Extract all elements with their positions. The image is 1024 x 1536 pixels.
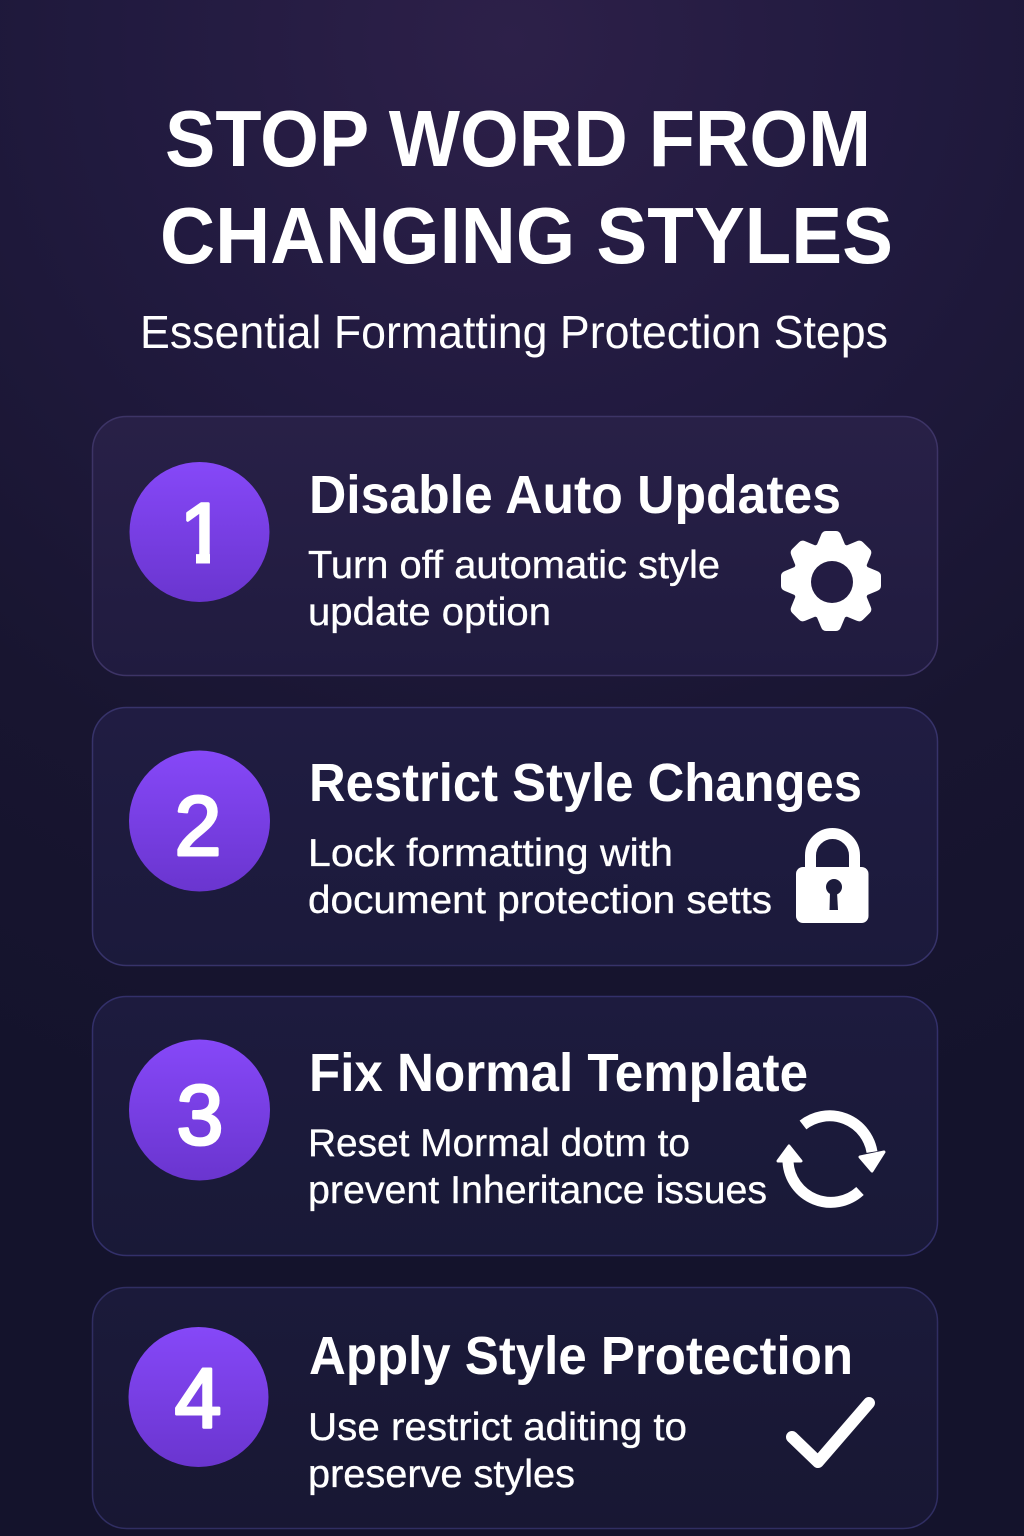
step 4 heading: Apply Style Protection <box>309 1326 853 1386</box>
card background <box>92 708 938 966</box>
number badge 3: 3 <box>177 1068 223 1162</box>
panel: step 3 <box>92 996 938 1256</box>
step 3 description <box>308 1122 767 1212</box>
step 4 description <box>308 1406 687 1496</box>
step 3 heading: Fix Normal Template <box>309 1043 808 1103</box>
title: STOP WORD FROM <box>165 94 871 183</box>
step 1 heading: Disable Auto Updates <box>309 465 841 525</box>
step 1 description: update option <box>308 591 551 634</box>
panel: step 2 <box>92 708 938 966</box>
step 4 description: Use restrict aditing to <box>308 1406 687 1449</box>
card background <box>92 416 938 676</box>
number badge 3 <box>129 1040 270 1180</box>
number badge 2: 2 <box>175 779 221 873</box>
step 2 heading: Restrict Style Changes <box>309 753 862 813</box>
panel: step 4 <box>92 1288 938 1528</box>
icon: padlock <box>796 834 868 923</box>
step 2 description: Lock formatting with <box>308 832 673 875</box>
panel: step 1 <box>92 416 938 676</box>
number badge 1 <box>130 462 270 602</box>
step 4 description: preserve styles <box>308 1453 575 1496</box>
icon: refresh arrows <box>778 1116 884 1202</box>
step 2 description <box>308 832 772 922</box>
step 1 description: Turn off automatic style <box>308 544 720 587</box>
subtitle: Essential Formatting Protection Steps <box>140 306 888 358</box>
icon: gear <box>781 531 881 631</box>
card background <box>92 1288 938 1528</box>
number badge 4: 4 <box>175 1351 221 1445</box>
icon: check mark <box>792 1403 869 1462</box>
step 3 description: prevent Inheritance issues <box>308 1169 767 1212</box>
step 2 description: document protection setts <box>308 879 772 922</box>
title: CHANGING STYLES <box>160 191 893 280</box>
number badge 4 <box>128 1327 268 1467</box>
step 3 description: Reset Mormal dotm to <box>308 1122 690 1165</box>
card background <box>92 996 938 1256</box>
number badge 2 <box>129 750 270 892</box>
number badge 1: 1 <box>180 486 226 580</box>
title <box>160 94 893 280</box>
step 1 description <box>308 544 720 634</box>
